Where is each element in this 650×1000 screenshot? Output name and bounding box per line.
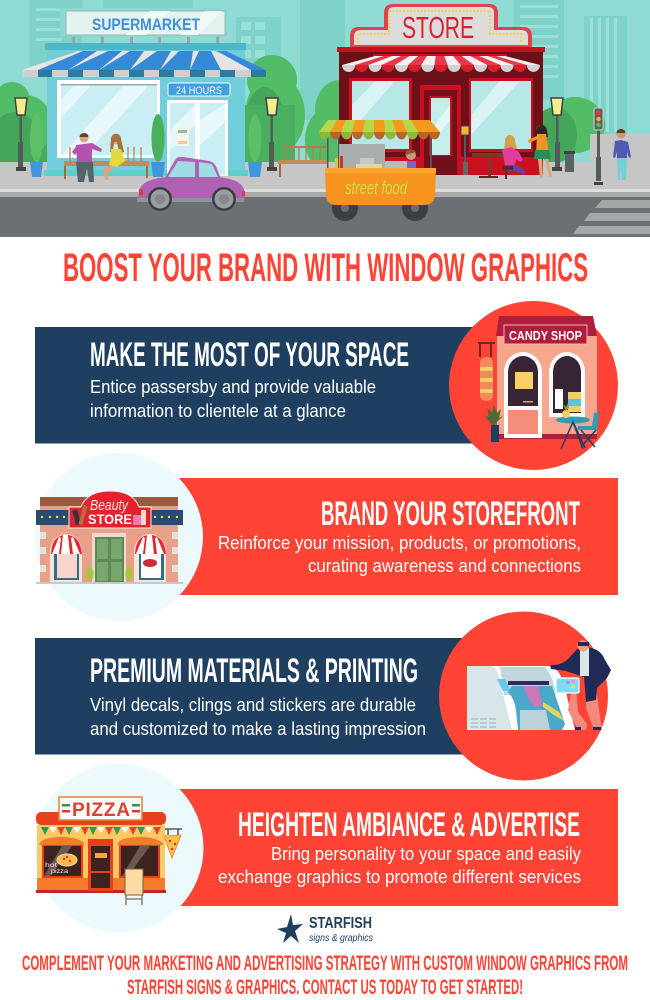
call to action xyxy=(22,952,628,999)
cafe customers xyxy=(502,125,552,179)
icon: pizza shop: PIZZA xyxy=(72,800,130,821)
street food cart: street food xyxy=(345,178,408,198)
supermarket: 24 HOURS xyxy=(176,85,222,97)
text block: storefront: curating awareness and connections xyxy=(308,556,581,576)
plants in blue pots xyxy=(30,114,262,177)
icon: large format printer and operator xyxy=(467,640,611,730)
text block: ambiance xyxy=(218,844,581,887)
sidewalk and road xyxy=(0,134,650,237)
text block: materials xyxy=(90,695,426,739)
panel: premium materials and printing xyxy=(35,612,611,780)
heading: space: MAKE THE MOST OF YOUR SPACE xyxy=(90,336,409,374)
logo: Starfish Signs & Graphics xyxy=(277,914,374,944)
icon: candy shop xyxy=(478,316,599,449)
icon: beauty store: Beauty xyxy=(90,497,129,514)
icon: pizza shop xyxy=(36,797,182,905)
icon: starfish xyxy=(277,914,303,943)
benches xyxy=(64,146,328,179)
text block: ambiance: Bring personality to your space and easily xyxy=(271,844,581,864)
trash can and traffic light xyxy=(564,108,603,185)
purple car xyxy=(137,157,245,211)
couple on bench xyxy=(72,133,125,182)
icon: beauty store: STORE xyxy=(88,511,132,527)
text block: space xyxy=(90,377,376,421)
text block: materials: and customized to make a lasting impression xyxy=(90,719,426,739)
logo tagline: signs & graphics xyxy=(309,932,374,944)
panel: make the most of your space xyxy=(35,301,618,470)
text block: materials: Vinyl decals, clings and stickers are durable xyxy=(90,695,416,715)
hero street scene xyxy=(0,0,650,237)
text block: space: Entice passersby and provide valuable xyxy=(90,377,376,397)
text block: ambiance: exchange graphics to promote different services xyxy=(218,867,581,887)
icon: pizza shop: hot xyxy=(45,863,57,869)
logo wordmark: STARFISH xyxy=(309,915,372,932)
text block: space: information to clientele at a glance xyxy=(90,401,346,421)
panel: brand your storefront xyxy=(35,453,618,621)
background city buildings xyxy=(30,0,627,134)
street food cart xyxy=(319,120,440,221)
panel: heighten ambiance and advertise xyxy=(34,764,618,932)
supermarket: SUPERMARKET xyxy=(92,15,200,34)
street lamps xyxy=(15,98,563,171)
icon: beauty store xyxy=(36,491,183,584)
pedestrian xyxy=(613,129,631,180)
text block: storefront xyxy=(218,533,581,576)
icon: pizza shop: pizza xyxy=(51,869,69,875)
small lamp and cafe table xyxy=(461,126,506,178)
trees xyxy=(0,55,605,170)
red store: STORE xyxy=(402,10,474,45)
text block: storefront: Reinforce your mission, products, or promotions, xyxy=(218,533,581,553)
icon: candy shop: CANDY SHOP xyxy=(509,328,582,343)
supermarket xyxy=(22,8,266,176)
heading: materials: PREMIUM MATERIALS & PRINTING xyxy=(90,652,418,690)
red store xyxy=(337,4,545,175)
